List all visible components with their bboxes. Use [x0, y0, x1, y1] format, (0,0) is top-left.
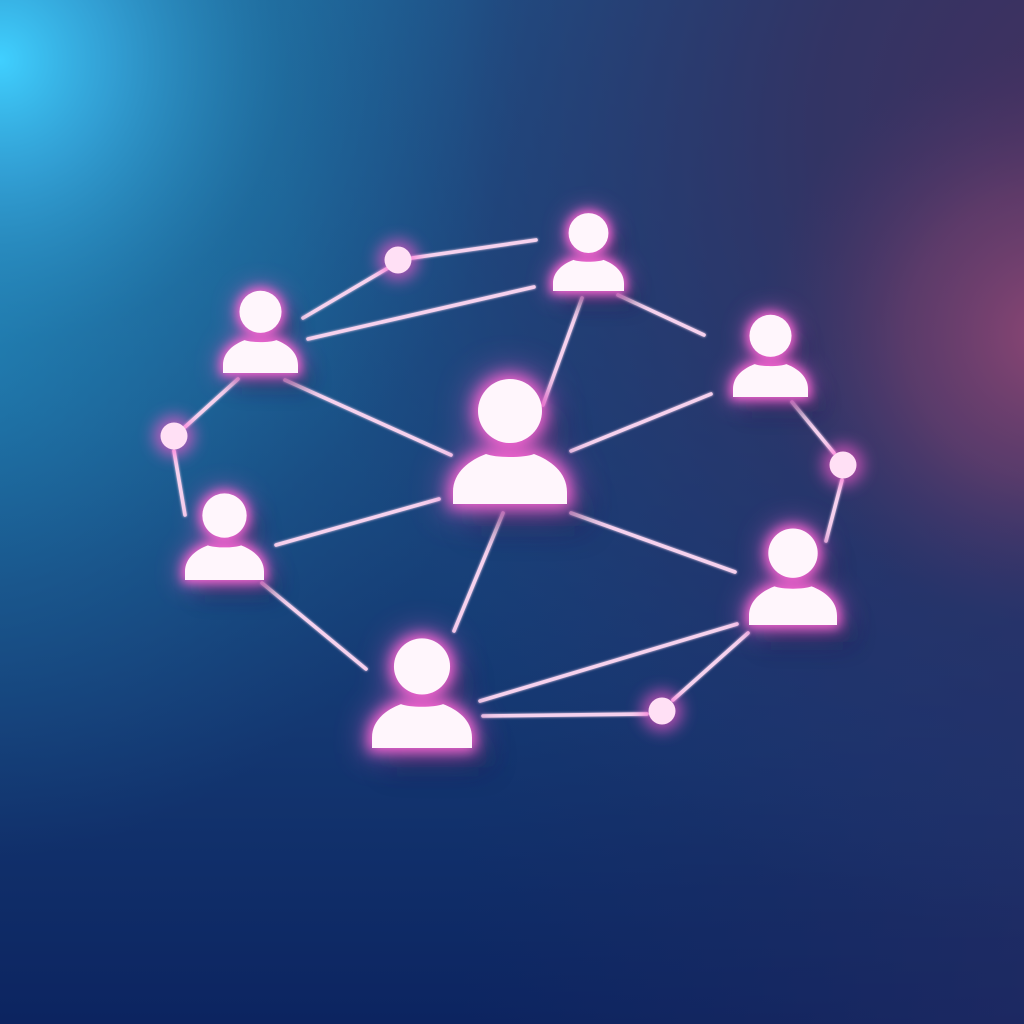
person icon: left — [185, 493, 276, 595]
small connector node: bottom — [642, 691, 682, 731]
person icon: top right — [553, 213, 635, 305]
small connector node: top — [378, 240, 418, 280]
small connector node: left — [154, 416, 194, 456]
person icon: bottom — [372, 638, 488, 767]
person icon: center — [453, 379, 585, 526]
person icon: top left — [223, 291, 310, 387]
person icon: right — [733, 315, 820, 411]
small connector node: right — [823, 445, 863, 485]
connection lines — [174, 240, 842, 716]
person icon: bottom right — [749, 528, 851, 642]
